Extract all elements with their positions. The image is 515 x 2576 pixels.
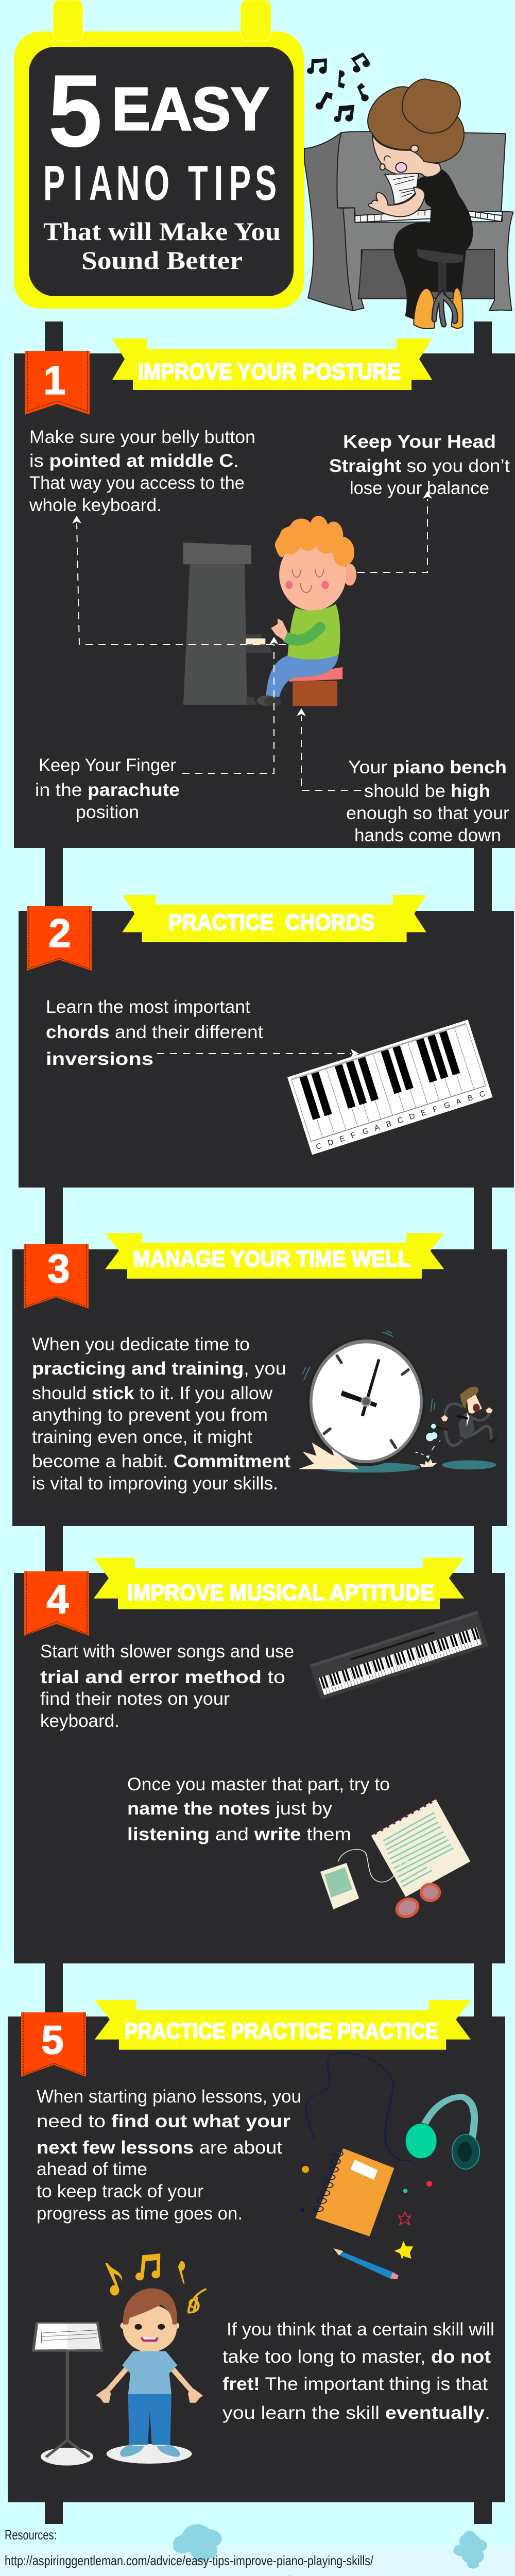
text: do not fret: you learn the skill eventually . <box>222 2403 490 2423</box>
ribbon heading 5 <box>95 2000 471 2050</box>
pencil <box>333 2248 399 2279</box>
panel 1: improve your posture <box>14 338 515 848</box>
singing boy: head <box>120 2289 179 2352</box>
text: head straight <box>329 432 510 498</box>
text: belly button: Make sure your belly button <box>29 427 255 447</box>
resources: Resources: <box>5 2527 57 2543</box>
text: finger position <box>35 755 180 822</box>
text: piano bench: enough so that your <box>346 803 509 823</box>
music player <box>320 1863 359 1909</box>
impact flash <box>298 1443 359 1469</box>
text: trial and error: find their notes on your <box>40 1689 230 1709</box>
illustration: labelled keyboard <box>287 1020 493 1155</box>
stool <box>417 249 464 263</box>
number badge 1 <box>25 351 90 415</box>
text: trial and error: trial and error method to <box>40 1667 285 1687</box>
text: do not fret: fret! The important thing is that <box>222 2374 488 2394</box>
text: belly button: whole keyboard. <box>29 495 162 515</box>
text: finger position: Keep Your Finger <box>39 755 176 775</box>
text: lessons: ahead of time <box>37 2159 147 2179</box>
number badge 3 <box>24 1244 89 1309</box>
number badge 1: 1 <box>43 358 66 403</box>
illustration: labelled keyboard: CDEFGABCDEFGABC <box>315 1089 486 1151</box>
text: piano bench: Your piano bench <box>348 757 507 777</box>
panel 3: manage your time well <box>12 1233 507 1526</box>
ribbon heading 3 <box>105 1233 444 1279</box>
text: chords: chords and their different <box>46 1022 263 1042</box>
text: commitment: anything to prevent you from <box>32 1405 268 1425</box>
number badge 5: 5 <box>41 2017 64 2062</box>
piano <box>337 131 506 216</box>
panel 5: practice practice practice <box>8 2000 505 2502</box>
text: belly button <box>29 427 255 515</box>
text: do not fret: take too long to master, do not <box>222 2347 491 2367</box>
text: head straight: Keep Your Head <box>343 432 496 452</box>
bun <box>402 79 460 133</box>
text: lessons: need to find out what your <box>37 2111 290 2131</box>
glasses <box>393 1881 443 1920</box>
illustration: clock chasing man <box>298 1331 497 1472</box>
hair back <box>368 87 464 163</box>
subtitle <box>43 217 281 275</box>
confetti <box>302 2166 309 2173</box>
cable <box>306 2053 410 2161</box>
text: trial and error <box>40 1641 294 1731</box>
illustration: boy body and music stand <box>32 2322 203 2466</box>
number badge 4 <box>24 1571 89 1636</box>
illustration: digital keyboard <box>310 1611 489 1700</box>
text: piano bench: should be high <box>364 781 490 801</box>
illustration: notepad, player and glasses <box>320 1799 470 1920</box>
music notes <box>105 2253 207 2313</box>
illustration: boy at piano <box>183 516 356 706</box>
text: finger position: in the parachute <box>35 780 180 800</box>
text: piano bench <box>346 757 509 845</box>
text: lessons <box>37 2087 301 2224</box>
title: easy: EASY <box>112 75 269 143</box>
text: do not fret <box>222 2319 494 2423</box>
ribbon heading 3: MANAGE YOUR TIME WELL <box>133 1246 410 1272</box>
title: 5: 5 <box>48 54 102 168</box>
text: chords: inversions <box>46 1049 153 1069</box>
boy <box>257 516 356 706</box>
arrow: bench <box>297 708 361 790</box>
number badge 5 <box>21 2012 86 2077</box>
motion lines <box>302 1331 435 1412</box>
text: commitment: training even once, it might <box>32 1427 252 1447</box>
text: commitment <box>32 1334 290 1494</box>
floor shadows <box>107 2444 192 2464</box>
text: lessons: to keep track of your <box>37 2181 203 2201</box>
title board <box>14 0 304 309</box>
text: name the notes: Once you master that part, try to <box>127 1774 390 1794</box>
music notes <box>307 53 370 122</box>
text: lessons: next few lessons are about <box>37 2138 282 2158</box>
text: head straight: Straight so you don’t <box>329 456 510 476</box>
arrow: head to text <box>357 491 432 572</box>
text: chords <box>46 997 263 1069</box>
ribbon heading 2: PRACTICE CHORDS <box>168 910 374 935</box>
stool base <box>434 295 455 325</box>
text: do not fret: If you think that a certain skill will <box>227 2319 494 2340</box>
ribbon heading 1: IMPROVE YOUR POSTURE <box>138 359 401 384</box>
boy body <box>96 2342 203 2457</box>
text: chords: Learn the most important <box>46 997 250 1017</box>
text: name the notes: name the notes just by <box>127 1799 333 1819</box>
ribbon heading 1 <box>112 338 432 390</box>
ribbon heading 2 <box>122 895 426 942</box>
ribbon heading 4: IMPROVE MUSICAL APTITUDE <box>127 1580 434 1605</box>
text: commitment: should stick to it. If you allow <box>32 1383 273 1403</box>
headphones <box>405 2097 479 2169</box>
dress <box>393 169 473 319</box>
music stand <box>32 2322 103 2457</box>
board legs <box>45 321 492 2524</box>
text: finger position: position <box>76 802 139 822</box>
subtitle: Sound Better <box>81 246 243 275</box>
ribbon heading 5: PRACTICE PRACTICE PRACTICE <box>125 2019 438 2044</box>
number badge 3: 3 <box>47 1246 70 1291</box>
text: name the notes <box>127 1774 390 1844</box>
arrow: belly button to keys <box>72 516 286 645</box>
text: lessons: progress as time goes on. <box>37 2204 243 2224</box>
text: belly button: is pointed at middle C . <box>29 451 239 471</box>
text: piano bench: hands come down <box>354 825 501 845</box>
dust <box>416 1424 440 1458</box>
text: commitment: practicing and training , you <box>32 1359 286 1379</box>
illustration: notebook, headphones, pencil <box>105 2053 479 2352</box>
ribbon heading 4 <box>94 1557 464 1609</box>
clock <box>307 1337 425 1466</box>
text: head straight: lose your balance <box>350 478 489 498</box>
text: commitment: When you dedicate time to <box>32 1334 250 1354</box>
number badge 2 <box>27 906 92 971</box>
text: commitment: is vital to improving your skills. <box>32 1473 278 1494</box>
text: commitment: become a habit. Commitment <box>32 1451 290 1471</box>
shoes <box>414 289 435 329</box>
arrow: finger <box>182 637 279 773</box>
subtitle: That will Make You <box>43 217 281 246</box>
face <box>372 134 441 177</box>
resources: http://aspiringgentleman.com/advice/easy-tips-improve-piano-playing-skills/ <box>5 2553 374 2568</box>
arm <box>369 187 425 217</box>
panel 4: improve musical aptitude <box>14 1557 505 1963</box>
ground shadows <box>317 1462 420 1472</box>
background clouds <box>23 2524 487 2576</box>
notepad <box>371 1799 470 1897</box>
text: belly button: That way you access to the <box>29 473 245 493</box>
illustration: woman playing piano <box>304 53 513 329</box>
notebook <box>314 2148 394 2236</box>
resources <box>5 2527 479 2576</box>
sheet of music <box>385 174 419 205</box>
arrow: inversions to keyboard <box>157 1049 359 1058</box>
text: trial and error: Start with slower songs and use <box>40 1641 294 1662</box>
text: lessons: When starting piano lessons, you <box>37 2087 301 2107</box>
text: trial and error: keyboard. <box>40 1711 119 1731</box>
number badge 4: 4 <box>46 1577 69 1622</box>
title: piano tips: PIANO TIPS <box>43 156 277 211</box>
panel 2: practice chords <box>19 895 514 1188</box>
text: name the notes: listening and write them <box>127 1824 351 1844</box>
running man <box>437 1387 497 1445</box>
piano <box>183 543 272 705</box>
number badge 2: 2 <box>48 910 71 956</box>
